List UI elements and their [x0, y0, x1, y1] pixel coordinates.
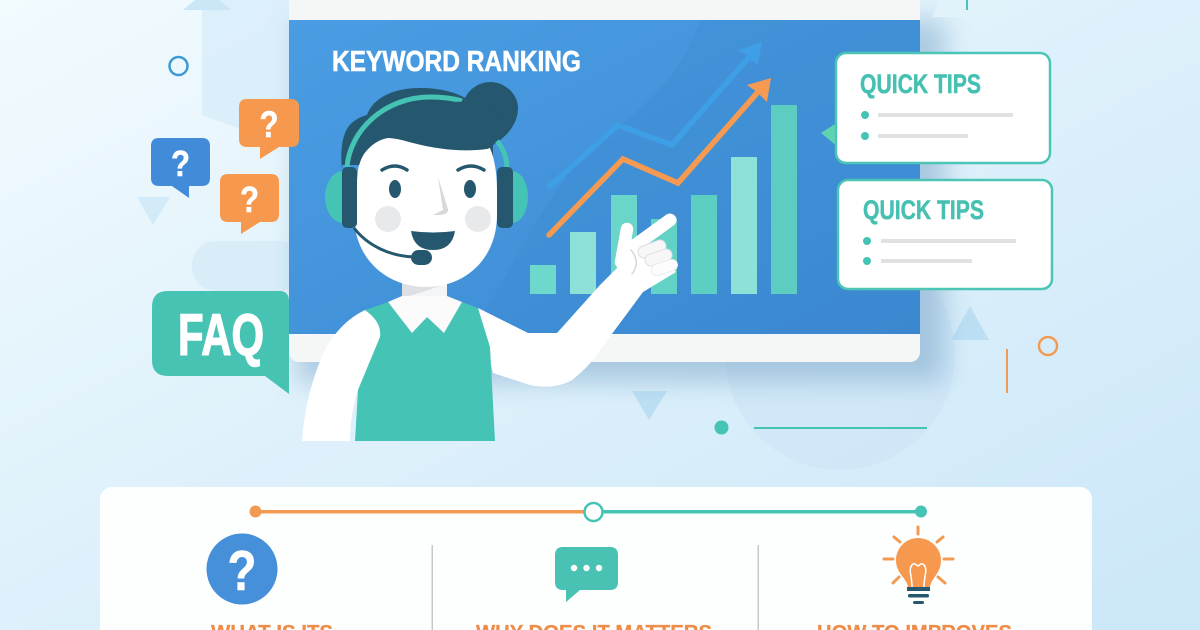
character: [302, 82, 676, 441]
microphone: [411, 250, 432, 265]
FAQ speech bubble: FAQ: [178, 303, 264, 368]
timeline: [250, 503, 927, 521]
icon: light bulb: [884, 527, 953, 604]
headphone bands: [342, 167, 357, 228]
eyes: [389, 180, 401, 198]
dividers: [432, 545, 433, 630]
headband: [347, 97, 462, 167]
FAQ speech bubble: [152, 291, 289, 394]
index finger: [637, 220, 670, 244]
orange question bubble lower: [220, 174, 279, 234]
blue trend arrow: [548, 42, 762, 188]
thumb: [621, 229, 627, 262]
monitor: [289, 0, 1012, 382]
bottom panel: [100, 487, 1092, 630]
nose: [433, 177, 448, 215]
quick tips card 1: [821, 53, 1050, 163]
bar chart: [530, 105, 797, 294]
face: [354, 138, 497, 287]
decorative ring blue: [170, 57, 188, 75]
mouth: [411, 231, 455, 250]
screen dark area: [470, 20, 920, 334]
collar: [388, 296, 462, 333]
back hair: [341, 82, 518, 170]
screen title: KEYWORD RANKING: [332, 46, 581, 78]
orange question bubble lower: ?: [240, 179, 259, 220]
neck: [402, 280, 447, 320]
hair fringe: [360, 100, 505, 160]
orange question bubble top: ?: [260, 104, 278, 145]
decorative ring orange: [1039, 337, 1057, 355]
vest: [355, 302, 495, 441]
right arm and palm: [478, 235, 676, 387]
quick tips card 2: QUICK TIPS: [863, 195, 984, 225]
orange trend arrow: [549, 78, 771, 235]
icon: question circle: ?: [228, 539, 256, 603]
neck shadow: [402, 283, 447, 298]
decorative teal dot and line: [714, 420, 927, 434]
monitor screen: [289, 20, 920, 334]
icon: chat bubble: [555, 547, 618, 602]
eyebrows: [382, 166, 484, 170]
curled fingers: [631, 246, 672, 274]
microphone boom: [354, 228, 414, 257]
cheeks: [375, 206, 401, 232]
blue question bubble: ?: [171, 143, 190, 184]
background decorations: [137, 0, 989, 470]
blue question bubble: [151, 138, 210, 198]
quick tips card 2: [838, 180, 1052, 289]
left arm: [302, 310, 380, 441]
quick tips card 1: QUICK TIPS: [860, 69, 981, 99]
decorative orange tick: [1006, 349, 1008, 393]
orange question bubble top: [239, 99, 299, 159]
icon: question circle: [206, 534, 278, 604]
ear cups: [325, 171, 361, 223]
